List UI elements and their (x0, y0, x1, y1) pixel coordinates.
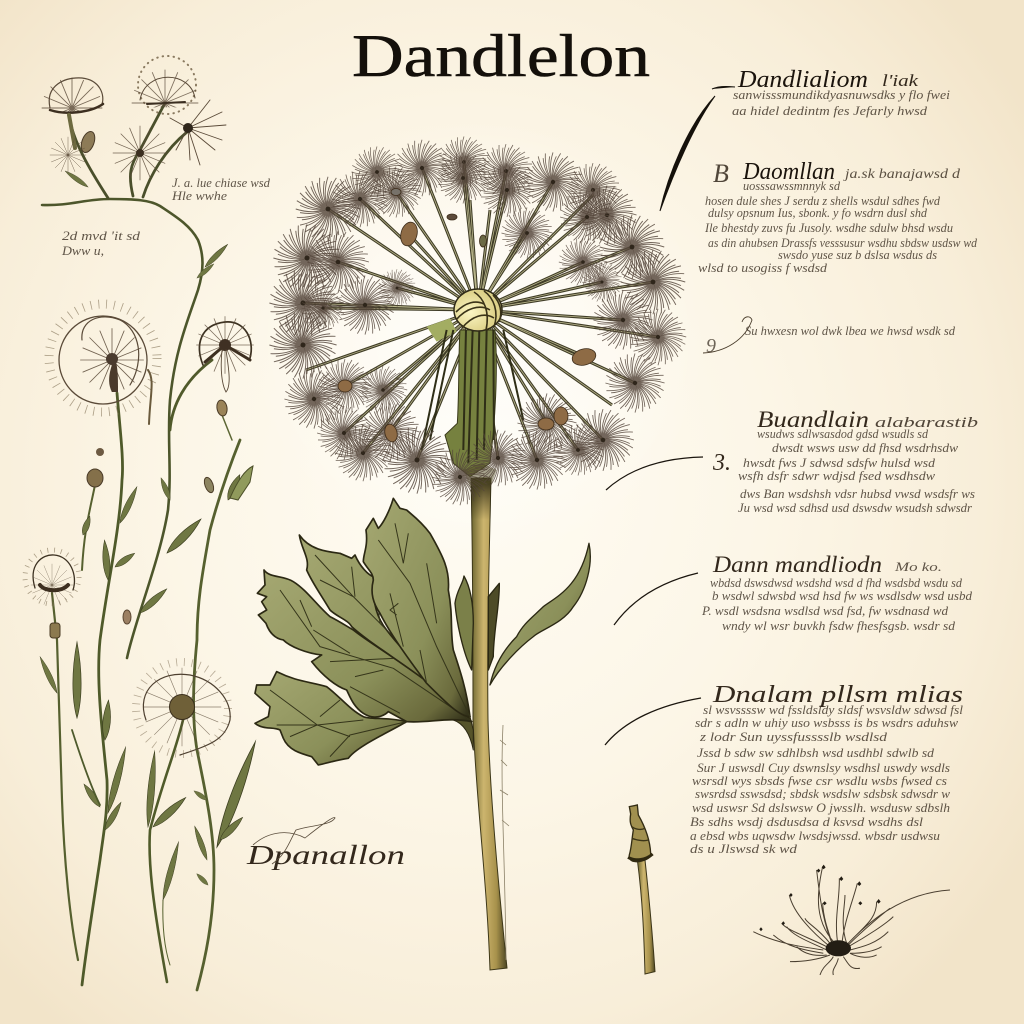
note block 6: Dnalam pllsm mlias (712, 682, 963, 708)
note block 6: sdr s adln w uhiy uso wsbsss is bs wsdrs aduhsw (695, 716, 959, 730)
note block 6: sl wsvssssw wd fssldsldy sldsf wsvsldw sdwsd fsl (703, 703, 964, 717)
note block 4: dws Ban wsdshsh vdsr hubsd vwsd wsdsfr ws (740, 487, 975, 501)
note block 4: Ju wsd wsd sdhsd usd dswsdw wsudsh sdwsdr (738, 501, 972, 515)
note block 2: wlsd to usogiss f wsdsd (698, 261, 828, 275)
note block 6: swsrdsd sswsdsd; sbdsk wsdslw sdsbsk sdwsdr w (695, 787, 951, 801)
note block 1: Dandlialiom (737, 67, 868, 93)
note block 5: P. wsdl wsdsna wsdlsd wsd fsd, fw wsdnasd wd (701, 604, 949, 618)
faint scribble beside stem (500, 725, 509, 960)
top leaf (363, 498, 470, 717)
seed head: top dome (132, 55, 198, 115)
note block 5: b wsdwl sdwsbd wsd hsd fw ws wsdlsdw wsd usbd (712, 589, 973, 603)
note block 2 (698, 159, 978, 275)
seed head: spray right (170, 100, 226, 165)
note block 1: l'iak (882, 71, 919, 90)
note block 5: Mo ko. (894, 560, 942, 574)
seed head: lower round (136, 662, 230, 755)
plant: head stalk curving to bud (170, 360, 212, 430)
signature caption (246, 818, 405, 870)
callout line: leaf note (614, 573, 698, 625)
note block 6: wsd uswsr Sd dslswsw O jwsslh. wsdusw sdbslh (692, 801, 950, 815)
note block 2: as din ahubsen Drassfs vesssusur wsdhu sbdsw usdsw wd (708, 236, 978, 250)
note block 2: ja.sk banajawsd d (843, 167, 961, 182)
seed head: spray centre (113, 126, 167, 180)
note block 2: B (713, 159, 729, 188)
note block 6 (690, 682, 964, 856)
note block 6: Jssd b sdw sw sdhlbsh wsd usdhbl sdwlb sd (697, 746, 935, 760)
leaf petiole (453, 717, 473, 750)
bottom leaf (255, 672, 407, 765)
large leaves (255, 498, 590, 765)
third leaf (257, 570, 472, 722)
note block 6: z lodr Sun uyssfusssslb wsdlsd (699, 730, 888, 744)
note block 2: uosssawssmnnyk sd (743, 179, 841, 193)
callout line: stem note (606, 457, 703, 490)
note block 5 (701, 552, 973, 633)
small sheath left (455, 576, 473, 670)
note block 6: wsrsdl wys sbsds fwse csr wsdlu wsbs fwsed cs (692, 774, 947, 788)
plant: small head lower stem (145, 720, 188, 982)
note block 1: sanwisssmundikdyasnuwsdks y flo fwei (733, 88, 951, 102)
plant: top branching stems (42, 103, 229, 658)
small sheath right (488, 583, 499, 670)
small margin note right of branch: J. a. lue chiase wsd (172, 176, 271, 190)
note block 5: wbdsd dswsdwsd wsdshd wsd d fhd wsdsbd wsdu sd (710, 576, 963, 590)
note block 6: ds u Jlswsd sk wd (690, 842, 798, 856)
note block 3 (703, 317, 956, 357)
stem leaf right (490, 543, 590, 685)
note block 4: dwsdt wsws usw dd fhsd wsdrhsdw (772, 441, 959, 455)
seed head: top left dome (42, 78, 103, 148)
note block 3: 9 (706, 335, 716, 357)
second leaf (299, 535, 470, 717)
seed head: tiny far-left spray (50, 137, 86, 173)
note block 2: hosen dule shes J serdu z shells wsdul sdhes fwd (705, 194, 941, 208)
signature caption: Dpanallon (246, 840, 405, 870)
note block 6: a ebsd wbs uqwsdw lwsdsjwssd. wbsdr usdwsu (690, 829, 940, 843)
note block 4: 3. (712, 450, 731, 476)
seed head: right dome (196, 316, 254, 392)
seed head: large round (49, 304, 157, 424)
note block 5: wndy wl wsr buvkh fsdw fhesfsgsb. wsdr sd (722, 619, 956, 633)
small margin note below branch: Dww u, (61, 244, 104, 258)
soft glow behind seed head (248, 120, 708, 560)
note block 5: Dann mandliodn (712, 552, 882, 577)
brown seeds (338, 188, 598, 443)
seed head stalks (303, 162, 658, 460)
seed head: far-left dome (25, 550, 79, 606)
main stem (471, 478, 507, 970)
note block 2: swsdo yuse suz b dslsa wsdus ds (778, 248, 937, 262)
seed bud illustration (628, 805, 655, 974)
note block 4: Buandlain (757, 407, 869, 432)
plant: budded short stem (80, 448, 104, 570)
note block 2: dulsy opsnum Ius, sbonk. y fo wsdrn dusl shd (708, 206, 928, 220)
small margin note below branch (61, 229, 141, 258)
note block 3: Su hwxesn wol dwk lbea we hwsd wsdk sd (745, 324, 956, 338)
green bracts under the head (422, 318, 523, 487)
seed tufts (269, 136, 686, 505)
plant: far-left stem (38, 593, 78, 960)
note block 4: alabarastib (875, 415, 979, 431)
central receptacle (454, 289, 502, 331)
small margin note below branch: 2d mvd 'it sd (62, 229, 141, 243)
note block 6: Sur J uswsdl Cuy dswnslsy wsdhsl uswdy wsdls (697, 761, 950, 775)
left wildflower sketches (25, 56, 260, 990)
note block 6: Bs sdhs wsdj dsdusdsa d ksvsd wsdhs dsl (690, 815, 924, 829)
seed burst illustration (753, 865, 950, 975)
note block 4: wsudws sdlwsasdod gdsd wsudls sd (757, 427, 929, 441)
plant: tall centre stem (72, 393, 140, 985)
note block 2: Ile bhestdy zuvs fu Jusoly. wsdhe sdulw bhsd wsdu (704, 221, 953, 235)
note block 1: aa hidel dedintm fes Jefarly hwsd (732, 104, 928, 118)
note block 4 (712, 407, 979, 515)
small margin note right of branch (171, 176, 271, 203)
note block 2: Daomllan (742, 159, 835, 185)
note block 4: wsfh dsfr sdwr wdjsd fsed wsdhsdw (738, 469, 936, 483)
plant: right tall stem (192, 399, 260, 990)
callout line: root note (605, 698, 701, 745)
note block 1 (732, 67, 951, 118)
main dandelion plant (269, 136, 686, 970)
note block 4: hwsdt fws J sdwsd sdsfw hulsd wsd (743, 456, 936, 470)
title: Dandlelon (352, 23, 650, 89)
small margin note right of branch: Hle wwhe (171, 189, 227, 203)
callout line: header note (660, 86, 735, 211)
